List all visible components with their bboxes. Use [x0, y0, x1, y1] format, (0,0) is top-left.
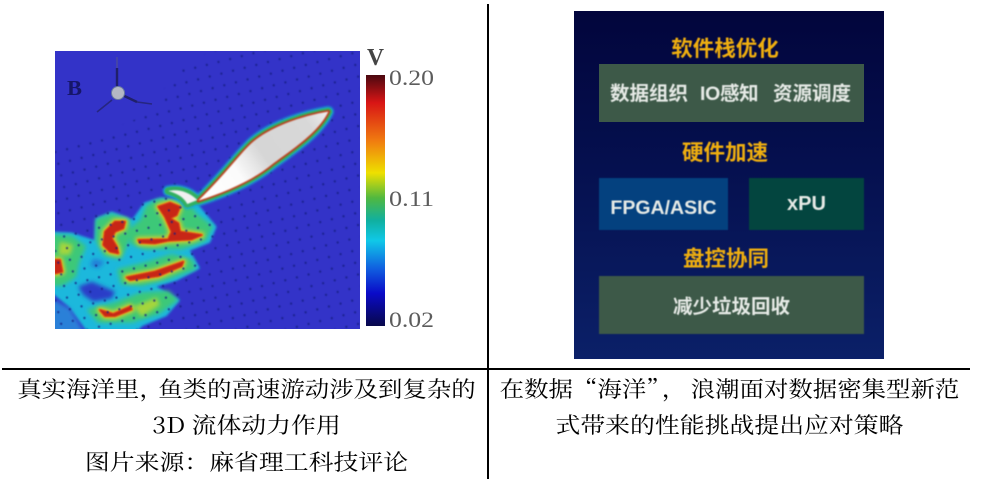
colorbar labels	[367, 45, 434, 332]
yellow halo	[55, 203, 202, 316]
caption: right	[500, 373, 959, 440]
caption: left: 3D 流体动力作用	[152, 409, 341, 440]
green zones	[48, 200, 212, 322]
caption: left: 图片来源：麻省理工科技评论	[85, 446, 408, 477]
caption: right: 式带来的性能挑战提出应对策略	[555, 409, 904, 440]
heading: disk-controller coordination: 盘控协同	[683, 247, 769, 271]
box: software items	[599, 64, 864, 122]
box: xPU: xPU	[787, 193, 826, 215]
colorbar labels: 0.11	[389, 186, 434, 211]
fish edge	[198, 112, 328, 201]
box: xPU	[749, 178, 864, 230]
green fish halo	[168, 112, 328, 204]
fish	[168, 112, 328, 204]
axis icon	[97, 57, 152, 112]
item: resource scheduling: 资源调度	[773, 83, 851, 105]
panel letter B: B	[67, 76, 82, 100]
yellow zones	[58, 242, 160, 317]
item: IO awareness: IO感知	[700, 83, 758, 105]
box: FPGA/ASIC	[599, 178, 728, 230]
colorbar labels: 0.20	[389, 65, 434, 90]
red vortices	[55, 203, 202, 316]
colorbar	[366, 75, 385, 326]
low-velocity holes	[55, 257, 117, 329]
colorbar labels: 0.02	[389, 307, 434, 332]
caption: left: 真实海洋里，鱼类的高速游动涉及到复杂的	[17, 373, 476, 404]
wake heat map	[48, 197, 217, 333]
caption: left	[17, 373, 476, 477]
colorbar labels: V	[367, 45, 385, 71]
orange halo	[55, 203, 202, 316]
box: reduce garbage collection	[599, 276, 864, 334]
plot background	[55, 51, 360, 329]
velocity arrows field	[55, 51, 360, 329]
table rule: horizontal	[2, 368, 970, 370]
heading: software stack: 软件栈优化	[671, 37, 779, 61]
box: FPGA/ASIC: FPGA/ASIC	[610, 197, 717, 219]
table rule: vertical	[487, 4, 489, 479]
fish body	[198, 112, 328, 201]
tail fin	[168, 190, 197, 204]
caption: right: 在数据“海洋”，浪潮面对数据密集型新范	[500, 373, 959, 404]
cyan envelope	[48, 197, 217, 333]
figure: fish flow simulation	[55, 45, 434, 332]
box: reduce garbage collection: 减少垃圾回收	[673, 296, 790, 318]
panel: strategy diagram	[574, 11, 884, 359]
heading: hardware acceleration: 硬件加速	[682, 141, 768, 165]
outer fish halo	[168, 112, 328, 204]
item: data organisation: 数据组织	[610, 83, 688, 105]
